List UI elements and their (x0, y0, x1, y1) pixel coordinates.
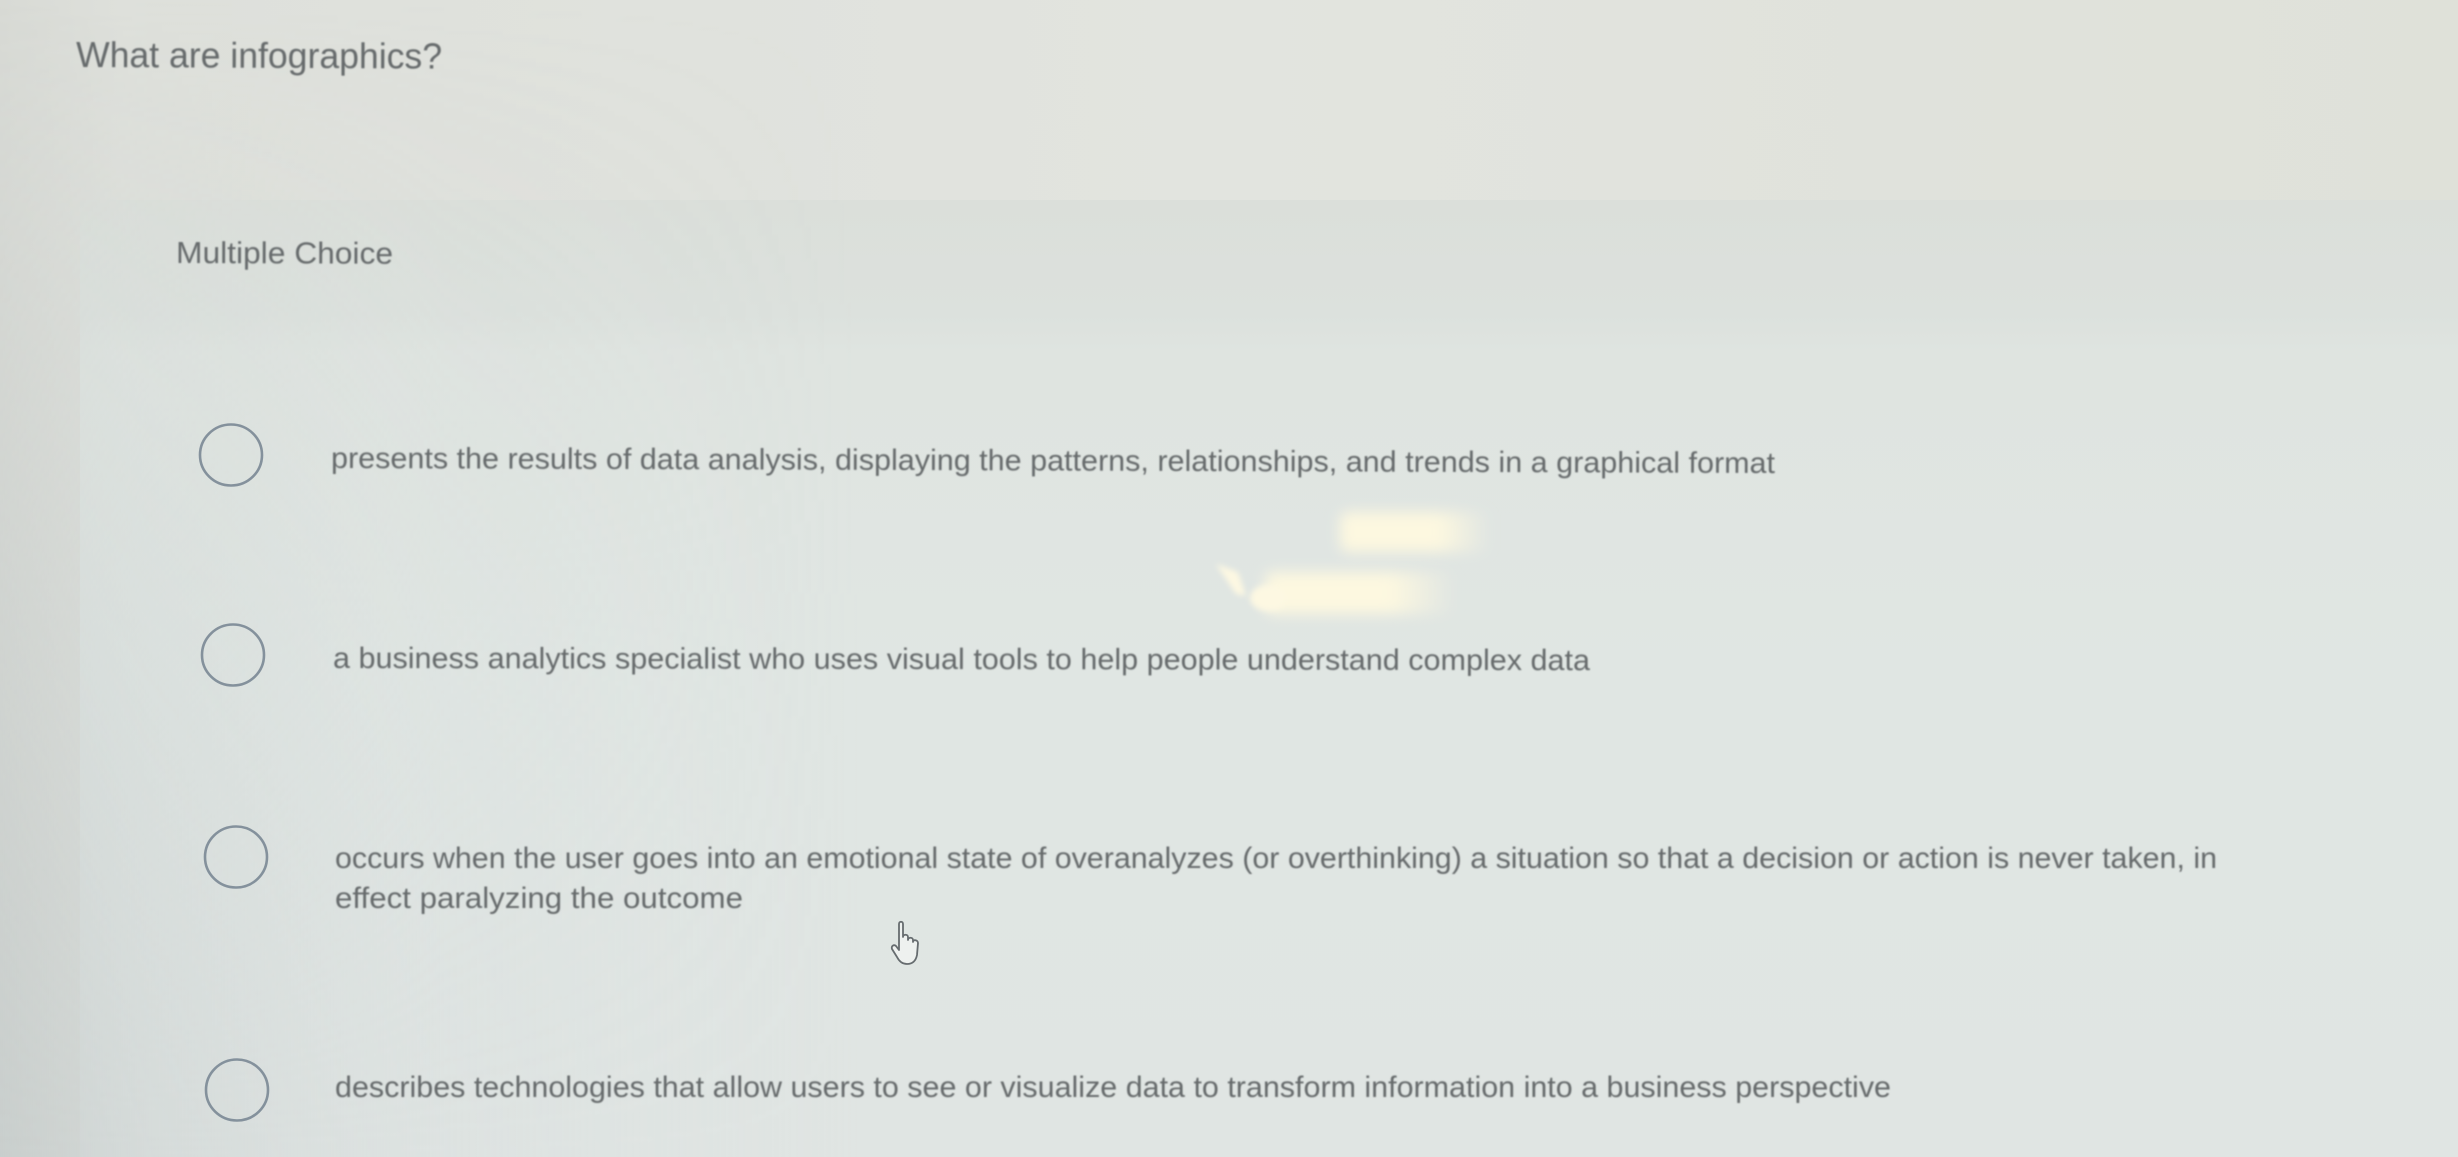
option 3 text (335, 842, 2217, 915)
answer option 2 (202, 624, 1591, 686)
option 3 text: occurs when the user goes into an emotional state of overanalyzes (or overthinking) a situation so that a decision or action is never taken, in (335, 842, 2217, 875)
answer option 1 (200, 424, 1775, 486)
option 1 text: presents the results of data analysis, displaying the patterns, relationships, and trends in a graphical format (331, 442, 1775, 480)
answer option 3 (205, 826, 2217, 915)
icon: radio button 4 (206, 1060, 268, 1120)
option 3 text: effect paralyzing the outcome (335, 882, 743, 915)
option 4 text: describes technologies that allow users to see or visualize data to transform information into a business perspective (335, 1071, 1891, 1104)
icon: hand cursor (892, 922, 918, 964)
title: What are infographics? (76, 34, 442, 77)
answer option 4 (206, 1060, 1891, 1120)
option 2 text: a business analytics specialist who uses visual tools to help people understand complex data (333, 642, 1591, 677)
panel: multiple choice question card (0, 465, 2458, 1157)
icon: radio button 2 (202, 624, 264, 686)
glare: light reflection on screen (1216, 512, 1490, 614)
icon: radio button 3 (205, 826, 267, 888)
label: multiple choice: Multiple Choice (176, 235, 393, 271)
icon: radio button 1 (200, 424, 262, 486)
